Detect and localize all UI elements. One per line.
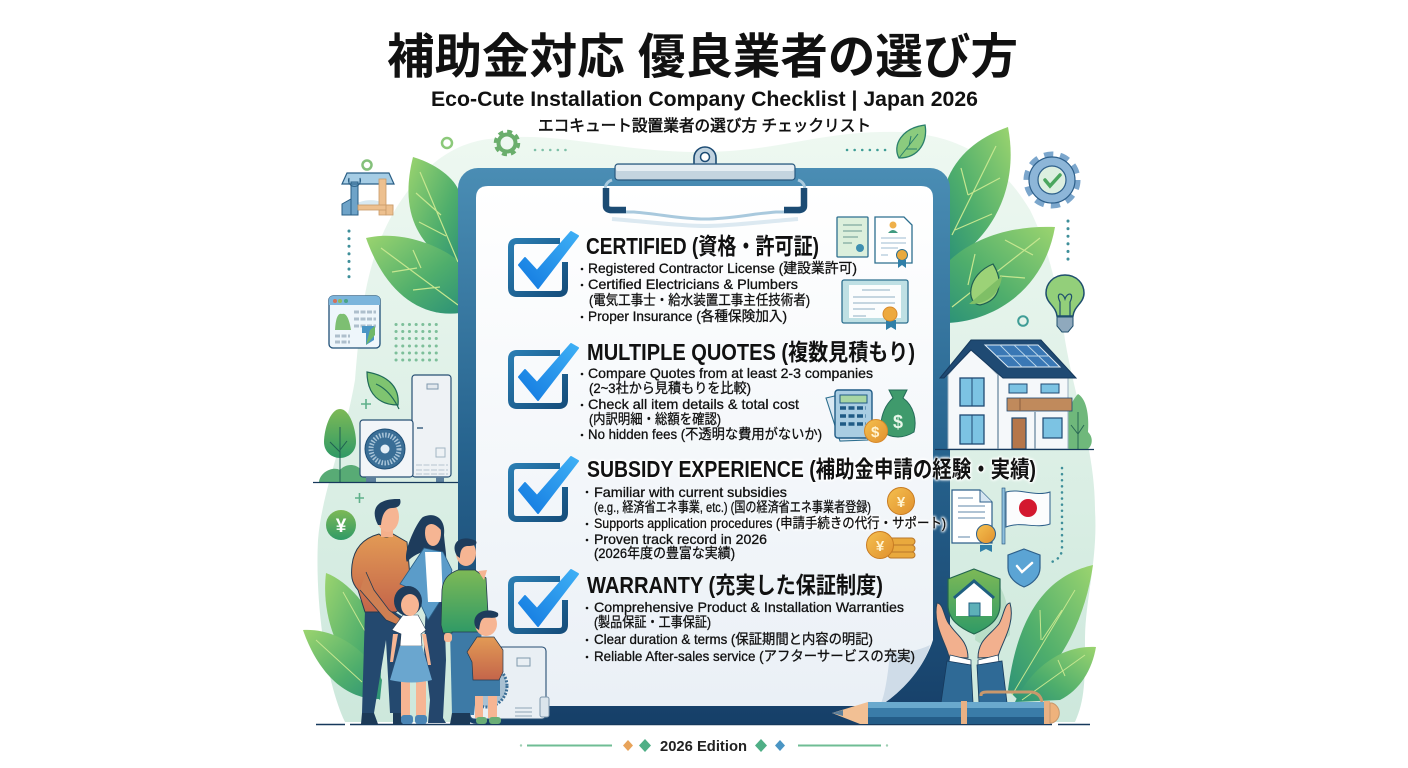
bullet text: Supports application procedures (申請手続きの代行・サポート) <box>594 515 946 531</box>
clip <box>605 147 805 226</box>
icon: blue shield <box>1008 549 1040 587</box>
icon: green yen coin <box>326 493 364 540</box>
dotted connector right <box>1048 468 1062 563</box>
paper sheet <box>476 186 933 706</box>
bullet text <box>586 599 915 664</box>
bullet text <box>581 365 873 442</box>
leaves upper right <box>948 127 1055 323</box>
icon: shield with house in hands <box>936 569 1011 703</box>
icon: leaf top right <box>897 125 926 158</box>
bullet text: Proven track record in 2026 <box>594 531 767 547</box>
icon: small gear top <box>496 132 518 154</box>
young boy <box>467 610 503 724</box>
icon: green yen coin: ¥ <box>336 516 347 537</box>
decorative ring and dots top left <box>442 138 573 150</box>
unit behind family <box>465 647 549 719</box>
ground line upper left <box>313 482 458 484</box>
older boy <box>441 538 489 724</box>
father <box>352 499 412 724</box>
decorative dots right <box>1066 221 1070 261</box>
decorative dots left <box>348 231 350 277</box>
icon: checkbox <box>511 232 578 294</box>
icon: japan flag <box>1002 488 1050 544</box>
girl <box>390 586 432 724</box>
icon: pen <box>832 692 1059 724</box>
background blob <box>317 132 1095 722</box>
bullet text: Proper Insurance (各種保険加入) <box>588 308 787 324</box>
icon: yen coins: ¥ <box>897 494 906 511</box>
bullet text: Clear duration & terms (保証期間と内容の明記) <box>594 631 873 647</box>
bullet text: Compare Quotes from at least 2-3 companies <box>588 365 873 381</box>
checklist section: certified <box>511 217 912 330</box>
footer: 2026 edition <box>520 739 888 755</box>
icon: calculator and money: $ <box>871 424 880 441</box>
title: 補助金対応 優良業者の選び方 <box>387 31 1018 84</box>
icon: calculator and money <box>826 390 915 442</box>
bullet text: Comprehensive Product & Installation Warranties <box>594 599 904 615</box>
bullet text: (製品保証・工事保証) <box>594 614 711 630</box>
bullet text: No hidden fees (不透明な費用がないか) <box>588 426 822 442</box>
bullet text: (2026年度の豊富な実績) <box>594 545 735 561</box>
ground line <box>316 724 1090 726</box>
leaves upper left <box>366 157 460 314</box>
decorative dot grid <box>396 324 440 360</box>
bullet text: Registered Contractor License (建設業許可) <box>588 260 857 276</box>
bullet text: (e.g., 経済省エネ事業, etc.) (国の経済省エネ事業者登録) <box>594 499 871 515</box>
decorative ring right <box>1018 316 1028 326</box>
bullet text: Check all item details & total cost <box>588 396 799 412</box>
heading: SUBSIDY EXPERIENCE (補助金申請の経験・実績) <box>587 456 1036 482</box>
icon: checkbox <box>511 344 578 406</box>
icon: eco cute heat pump unit <box>360 375 451 482</box>
bullet text: Certified Electricians & Plumbers <box>588 276 798 292</box>
icon: small leaf on big leaf <box>969 264 1002 305</box>
icon: certificates <box>837 217 912 330</box>
icon: house with solar panels <box>935 340 1094 450</box>
icon: gear with check <box>1027 155 1077 205</box>
icon: signed document with medal <box>952 490 996 552</box>
leaves lower right <box>1008 565 1096 702</box>
bullet text: (2~3社から見積もりを比較) <box>589 380 751 396</box>
leaves lower left <box>303 573 382 700</box>
icon: yen coins <box>866 488 915 558</box>
page curl <box>880 645 930 706</box>
heading: CERTIFIED (資格・許可証) <box>586 233 819 259</box>
footer: 2026 edition: 2026 Edition <box>660 739 747 755</box>
icon: browser window <box>329 296 380 348</box>
bullet text: Familiar with current subsidies <box>594 484 787 500</box>
icon: light bulb <box>1046 275 1084 332</box>
checklist section: warranty <box>511 570 915 664</box>
icon: tools <box>342 160 394 215</box>
heading: WARRANTY (充実した保証制度) <box>587 572 883 598</box>
icon: checkbox <box>511 457 578 519</box>
board frame <box>458 168 950 724</box>
bullet text <box>586 484 946 561</box>
clipboard <box>458 147 950 724</box>
checklist section: subsidy experience <box>511 456 1036 561</box>
family illustration <box>352 499 503 724</box>
icon: tree left <box>319 409 368 482</box>
subtitle english: Eco-Cute Installation Company Checklist | Japan 2026 <box>431 88 978 111</box>
decorative dots top right <box>847 149 886 151</box>
icon: yen coins: ¥ <box>876 538 885 555</box>
icon: small leaf <box>361 372 399 409</box>
bullet text: (電気工事士・給水装置工事主任技術者) <box>589 292 810 308</box>
subtitle japanese: エコキュート設置業者の選び方 チェックリスト <box>538 117 871 135</box>
bullet text: (内訳明細・総額を確認) <box>589 411 721 427</box>
icon: checkbox <box>511 570 578 631</box>
heading: MULTIPLE QUOTES (複数見積もり) <box>587 339 915 365</box>
bullet text <box>581 260 857 324</box>
mother <box>400 515 452 723</box>
checklist section: multiple quotes <box>511 339 915 442</box>
bullet text: Reliable After-sales service (アフターサービスの充実) <box>594 648 915 664</box>
icon: calculator and money: $ <box>893 412 903 432</box>
